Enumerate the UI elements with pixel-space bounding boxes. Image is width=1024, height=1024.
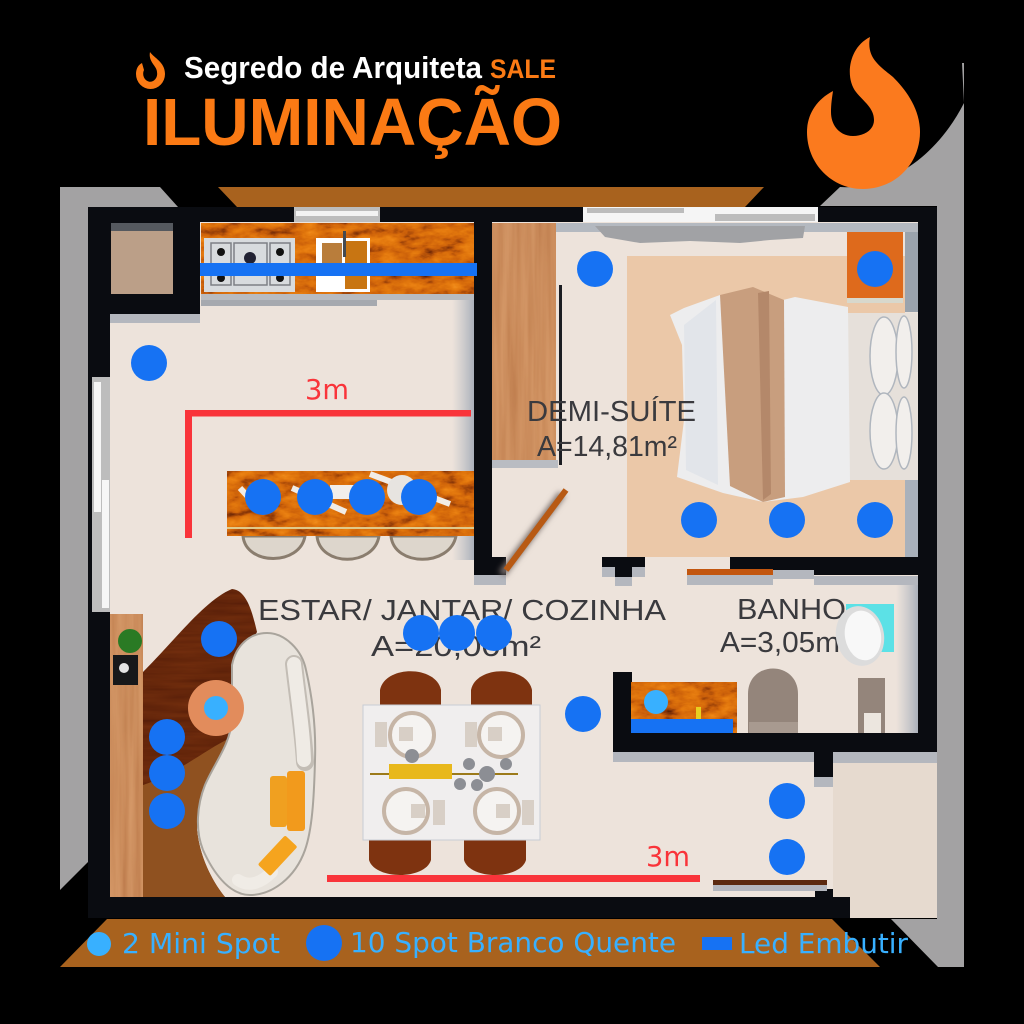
pillows [870,316,912,469]
led strip kitchen [200,263,477,276]
wall stub and t wall [474,207,937,918]
outdoor area [833,755,937,918]
wall trim strips [110,314,937,891]
napkins [375,722,534,825]
label: demi-suite: DEMI-SUÍTE [527,395,696,428]
living furniture [110,589,315,897]
label: bath: BANHO [737,594,846,626]
red measure lines [185,410,700,882]
nightstand [847,232,903,298]
window left [92,377,110,612]
curtain [595,226,805,243]
bidet/shower unit [858,678,885,733]
top trim [556,223,918,232]
measure labels [305,373,690,873]
organic rug [143,589,257,897]
floor plan [88,207,937,918]
legend text: led: Led Embutir [739,927,908,960]
brand name: Segredo de Arquiteta [184,50,483,85]
cyan swatch [846,604,894,652]
table top [363,705,540,840]
ceiling lamp sample [831,602,894,670]
window kitchen [294,207,380,222]
chairs [369,671,532,875]
legend icon: spot [306,925,342,961]
main heading: ILUMINAÇÃO [143,85,562,160]
centerpiece [370,773,518,775]
bed [670,295,850,502]
label: bath area: A=3,05m² [720,627,850,659]
label: 3m top: 3m [305,373,349,406]
bathroom led strip [631,719,733,733]
icon: big flame [807,37,920,189]
stove [204,238,295,292]
rug [627,256,905,557]
spots: white warm [131,251,893,875]
door entrance [713,880,827,885]
mini spots [204,690,668,720]
blanket [720,287,785,502]
label: living: ESTAR/ JANTAR/ COZINHA [258,595,667,627]
living and bedroom floor [110,222,918,897]
legend icon: mini spot [87,932,111,956]
sofa [198,633,315,895]
door bathroom [687,569,773,575]
round side table [188,680,244,736]
legend [87,925,908,961]
top brown band [218,187,764,207]
icon: small flame logo [136,52,165,89]
label: 3m bottom: 3m [646,840,690,873]
legend text: mini spot: 2 Mini Spot [122,927,280,960]
stools [243,536,456,559]
window bedroom [583,207,818,222]
sink [316,231,370,292]
outer walls [88,207,937,918]
kitchen counter [201,223,474,306]
label: demi-suite area: A=14,81m² [537,431,677,463]
wardrobe [492,223,556,460]
bathroom fixtures [631,668,885,733]
lamp [831,602,889,670]
shading right walls [452,300,474,560]
sale tag: SALE [490,54,556,84]
vanity [631,682,737,733]
door suite [502,490,566,574]
cushions [270,776,287,827]
bedroom furniture [492,223,918,557]
bar counter [227,471,474,559]
headboard zone [848,313,918,480]
label: living area: A=20,00m² [371,631,541,663]
gray backing shapes [60,63,964,967]
closet utility [111,223,173,294]
title block [136,50,562,160]
toilet [748,668,798,733]
room labels [258,395,850,663]
console [110,614,143,897]
bottom brown legend band [60,919,880,967]
legend icon: led [702,937,732,950]
dining set [363,671,540,875]
legend text: spot: 10 Spot Branco Quente [350,926,676,959]
place settings [240,474,450,512]
plates [384,713,523,833]
plant [113,629,142,685]
